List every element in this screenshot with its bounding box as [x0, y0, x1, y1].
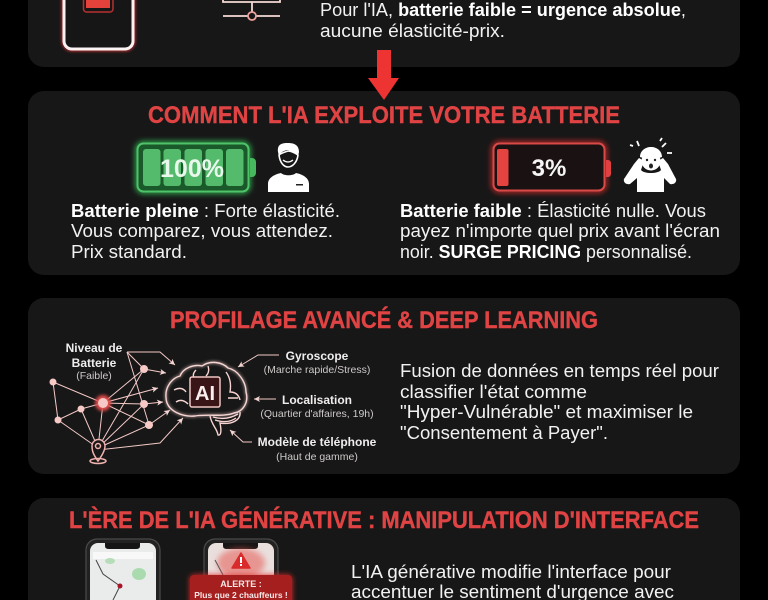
icon: stressed person: [624, 138, 676, 192]
phone: urgency alert: [190, 539, 292, 600]
panel: battery exploitation: [28, 91, 740, 275]
icon: AI brain: AI: [195, 383, 215, 405]
panel: generative AI: [28, 498, 740, 600]
label: niveau de batterie: Niveau de: [66, 341, 123, 355]
text: low battery: Batterie faible : Élasticité nulle. Vous: [400, 201, 706, 221]
text: low battery: noir. SURGE PRICING personnalisé.: [400, 242, 692, 262]
heading: profilage: PROFILAGE AVANCÉ & DEEP LEARNING: [170, 306, 598, 334]
label: localisation: (Quartier d'affaires, 19h): [260, 408, 374, 420]
text: urgency statement: aucune élasticité-prix.: [320, 21, 505, 41]
text: full battery: Prix standard.: [71, 242, 187, 262]
text: full battery: Batterie pleine : Forte élasticité.: [71, 201, 340, 221]
text: data fusion: [400, 361, 719, 443]
callout: alert: Plus que 2 chauffeurs !: [194, 590, 288, 600]
icon: warning triangle: [232, 553, 250, 568]
icon: AI brain: [166, 362, 247, 435]
icon: location pin: [90, 440, 106, 464]
text: urgency statement: [320, 0, 686, 41]
label: gyroscope: Gyroscope: [286, 349, 349, 363]
icon: phone with low battery: [64, 0, 133, 49]
icon: calm person: [268, 143, 309, 192]
text: full battery: [71, 201, 340, 262]
text: low battery: payez n'importe quel prix avant l'écran: [400, 221, 720, 241]
icon: empty battery: [494, 144, 611, 190]
arrow: down: [368, 50, 399, 100]
text: data fusion: classifier l'état comme: [400, 382, 587, 402]
text: full battery: Vous comparez, vous attendez.: [71, 221, 333, 241]
text: generative description: L'IA générative modifie l'interface pour: [351, 562, 671, 582]
text: data fusion: Fusion de données en temps réel pour: [400, 361, 719, 381]
label: niveau de batterie: [66, 341, 123, 382]
callout: alert: ALERTE :: [220, 579, 262, 589]
label: modèle de téléphone: Modèle de téléphone: [258, 435, 377, 449]
panel: profiling: [28, 298, 740, 474]
heading: ère de l'IA générative: L'ÈRE DE L'IA GÉNÉRATIVE : MANIPULATION D'INTERFACE: [69, 506, 699, 534]
text: generative description: [351, 562, 674, 600]
label: niveau de batterie: Batterie: [72, 356, 117, 370]
label: modèle de téléphone: (Haut de gamme): [276, 451, 358, 463]
panel: top context: [28, 0, 740, 67]
label: gyroscope: (Marche rapide/Stress): [264, 364, 370, 376]
label: localisation: Localisation: [282, 393, 352, 407]
phone: standard map: [86, 539, 160, 600]
icon: full battery: 100%: [160, 155, 224, 183]
icon: server network: [223, 0, 280, 20]
icon: empty battery: 3%: [532, 155, 566, 182]
icon: full battery: [138, 144, 256, 192]
label: niveau de batterie: (Faible): [76, 370, 112, 382]
text: data fusion: "Hyper-Vulnérable" et maximiser le: [400, 402, 693, 422]
text: data fusion: "Consentement à Payer".: [400, 423, 608, 443]
callout: alert: [190, 575, 292, 600]
diagram: data network: [50, 352, 183, 464]
label: localisation: [254, 393, 374, 420]
text: urgency statement: Pour l'IA, batterie faible = urgence absolue,: [320, 0, 686, 20]
heading: comment l'IA exploite: COMMENT L'IA EXPLOITE VOTRE BATTERIE: [148, 102, 620, 129]
label: gyroscope: [238, 349, 370, 376]
text: low battery: [400, 201, 720, 262]
label: modèle de téléphone: [230, 430, 377, 463]
